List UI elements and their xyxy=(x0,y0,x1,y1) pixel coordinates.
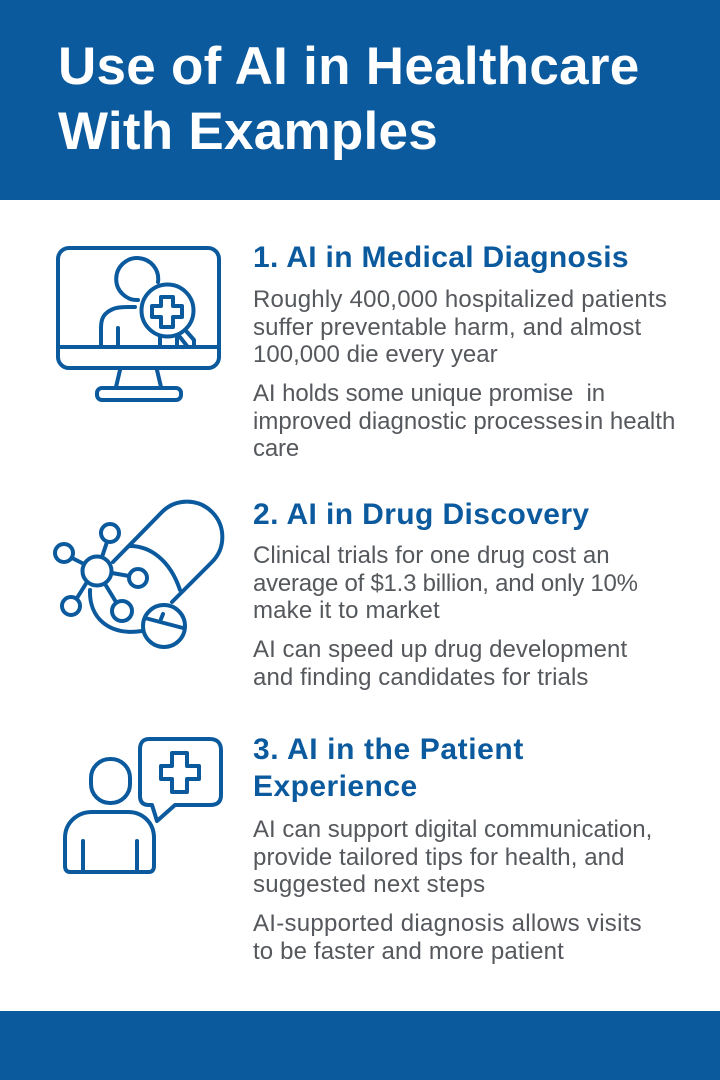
heading 3: 3. AI in the Patient xyxy=(253,733,524,766)
text: preventable harm: 100,000 die every year xyxy=(253,341,498,368)
heading 2: 2. AI in Drug Discovery xyxy=(253,498,590,531)
text: faster visits: AI-supported diagnosis allows visits xyxy=(253,910,642,937)
text: diagnostic promise: care xyxy=(253,435,299,462)
text: speeding development: AI can speed up drug development xyxy=(253,636,627,663)
text: preventable harm: Roughly 400,000 hospitalized patients xyxy=(253,286,667,313)
text: preventable harm xyxy=(253,286,667,368)
text: speeding development xyxy=(253,636,627,691)
icon: monitor with patient and magnifier xyxy=(56,246,221,402)
title: Use of AI in Healthcare xyxy=(58,37,640,96)
text: clinical trial cost xyxy=(253,542,638,624)
heading 3 xyxy=(253,733,524,803)
title: With Examples xyxy=(58,102,438,161)
panel: AI in the patient experience xyxy=(63,733,652,965)
panel: AI in medical diagnosis xyxy=(56,241,675,462)
text: diagnostic promise xyxy=(253,380,675,462)
heading 3: Experience xyxy=(253,770,418,803)
text: digital communication: provide tailored tips for health, and xyxy=(253,844,625,871)
title xyxy=(58,37,640,161)
text: digital communication: AI can support digital communication, xyxy=(253,816,652,843)
icon: capsule with molecule and pill xyxy=(53,500,224,649)
text: diagnostic promise: AI holds some unique promise in xyxy=(253,380,605,407)
heading 1: 1. AI in Medical Diagnosis xyxy=(253,241,629,274)
icon: patient with medical speech bubble xyxy=(63,737,223,874)
footer banner xyxy=(0,1011,720,1080)
text: faster visits: to be faster and more patient xyxy=(253,938,564,965)
text: clinical trial cost: Clinical trials for one drug cost an xyxy=(253,542,610,569)
text: preventable harm: suffer preventable harm, and almost xyxy=(253,314,641,341)
text: speeding development: and finding candidates for trials xyxy=(253,664,589,691)
text: faster visits xyxy=(253,910,642,965)
header banner xyxy=(0,0,720,200)
text: digital communication: suggested next steps xyxy=(253,871,485,898)
text: clinical trial cost: average of $1.3 billion, and only 10% xyxy=(253,570,638,597)
text: clinical trial cost: make it to market xyxy=(253,597,440,624)
text: diagnostic promise: improved diagnostic processes in health xyxy=(253,408,675,435)
text: digital communication xyxy=(253,816,652,898)
panel: AI in drug discovery xyxy=(53,498,638,691)
